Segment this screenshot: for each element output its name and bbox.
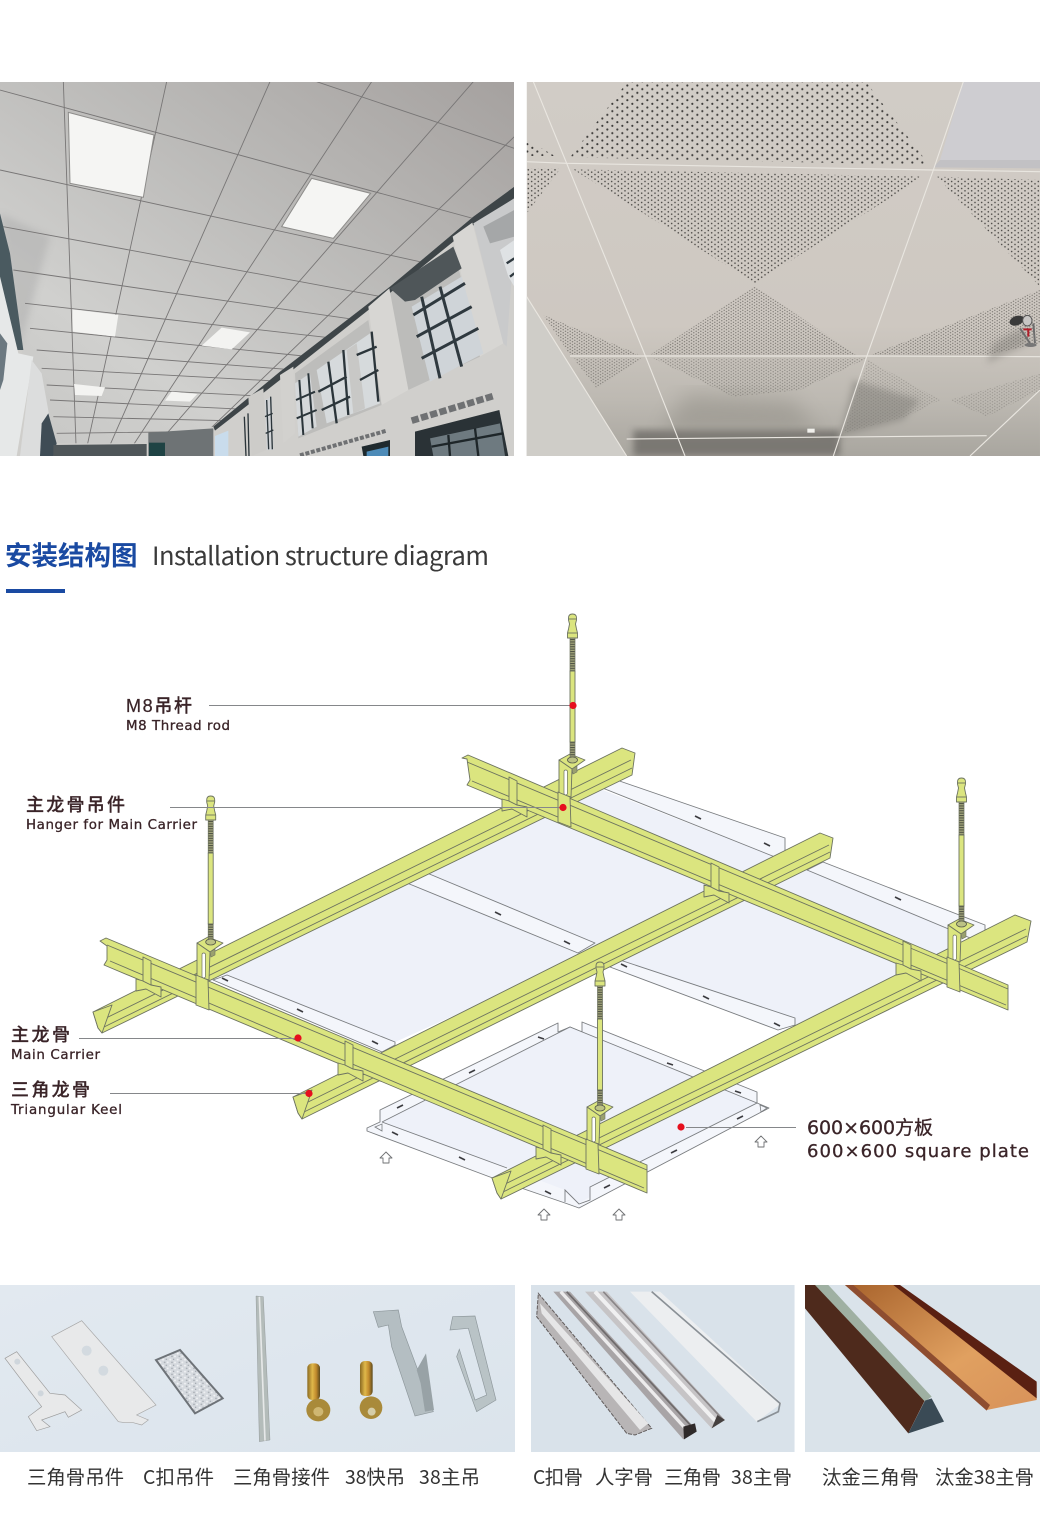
captions: hardware accessories: 三角骨吊件 <box>27 1461 124 1490</box>
gold triangle keel <box>805 1285 925 1433</box>
main carrier joints <box>136 777 921 1165</box>
perforated diamonds <box>570 83 929 165</box>
label: M8 thread rod: M8 Thread rod <box>126 719 230 734</box>
captions: keel profiles: C扣骨 <box>533 1461 583 1490</box>
captions: keel profiles: 人字骨 <box>595 1461 653 1490</box>
triangular keel: lower right <box>492 915 1031 1199</box>
wall <box>220 218 472 421</box>
captions: gold keel profiles: 汰金三角骨 <box>822 1461 919 1490</box>
dropped square plate <box>367 1022 769 1208</box>
captions: keel profiles: 38主骨 <box>731 1461 792 1490</box>
sprinkler <box>987 314 1037 363</box>
C clip keel <box>537 1293 652 1435</box>
label: main carrier: 主龙骨 <box>11 1025 70 1045</box>
captions: hardware accessories <box>27 1461 480 1490</box>
threaded rod <box>256 1296 270 1442</box>
label: main carrier <box>11 1025 100 1063</box>
heading underline <box>6 589 65 593</box>
keel connector <box>156 1350 223 1413</box>
red marker dots <box>294 702 685 1131</box>
grid <box>533 82 685 456</box>
upward arrows <box>380 1136 767 1220</box>
photo: perforated metal ceiling panels <box>527 82 1040 456</box>
photo: hardware accessories <box>0 1285 515 1452</box>
installation structure diagram <box>10 614 1031 1220</box>
captions: keel profiles <box>533 1461 792 1490</box>
M8 thread rods <box>206 614 966 1111</box>
lower windows <box>415 410 508 456</box>
label: 600x600 square plate <box>807 1117 1029 1162</box>
panel slots <box>222 816 901 1194</box>
triangular keel: upper left <box>93 748 635 1033</box>
expansion bolts <box>307 1363 320 1400</box>
main carrier: upper <box>462 755 1008 1010</box>
label: hanger for main carrier: Hanger for Main Carrier <box>26 818 197 833</box>
reflections <box>840 380 920 437</box>
C clip hanger plate <box>52 1321 156 1425</box>
captions: keel profiles: 三角骨 <box>664 1461 721 1490</box>
top right panel <box>940 82 1040 160</box>
hanger brackets <box>196 754 974 1174</box>
captions: gold keel profiles: 汰金38主骨 <box>935 1461 1034 1490</box>
main carrier: lower <box>100 938 647 1193</box>
hooks <box>373 1310 433 1416</box>
label: hanger for main carrier: 主龙骨吊件 <box>26 795 125 815</box>
heading: English title: Installation structure diagram <box>152 536 489 573</box>
left side <box>0 213 23 350</box>
label: main carrier: Main Carrier <box>11 1048 100 1063</box>
label: 600x600 square plate: 600×600 square plate <box>807 1141 1029 1162</box>
photo: ceiling hall interior <box>0 82 514 456</box>
gold 38 main keel <box>845 1285 1037 1410</box>
triangular keel: middle <box>293 833 833 1119</box>
captions: hardware accessories: 38快吊 <box>345 1461 405 1490</box>
label: hanger for main carrier <box>26 795 197 833</box>
captions: hardware accessories: 三角骨接件 <box>233 1461 330 1490</box>
label: triangular keel: Triangular Keel <box>10 1103 122 1118</box>
label: triangular keel: 三角龙骨 <box>11 1080 90 1100</box>
captions: hardware accessories: C扣吊件 <box>143 1461 214 1490</box>
label: M8 thread rod <box>126 696 230 734</box>
leader lines <box>79 706 796 1128</box>
label: 600x600 square plate: 600×600方板 <box>807 1117 933 1139</box>
heading: Chinese title: 安装结构图 <box>5 534 138 573</box>
triangle keel hanger plate <box>5 1352 82 1431</box>
label: triangular keel <box>10 1080 122 1118</box>
photo: gold-coloured keel profiles <box>805 1285 1040 1452</box>
triangle keel <box>585 1292 725 1428</box>
ceiling panels <box>213 776 985 1052</box>
captions: hardware accessories: 38主吊 <box>419 1461 480 1490</box>
far end <box>53 444 147 456</box>
38 main keel <box>630 1292 782 1422</box>
wall <box>527 297 627 456</box>
label: M8 thread rod: M8吊杆 <box>126 696 192 716</box>
photo: keel profiles <box>531 1285 795 1452</box>
tee keel <box>553 1292 697 1439</box>
captions: gold keel profiles <box>822 1461 1034 1490</box>
